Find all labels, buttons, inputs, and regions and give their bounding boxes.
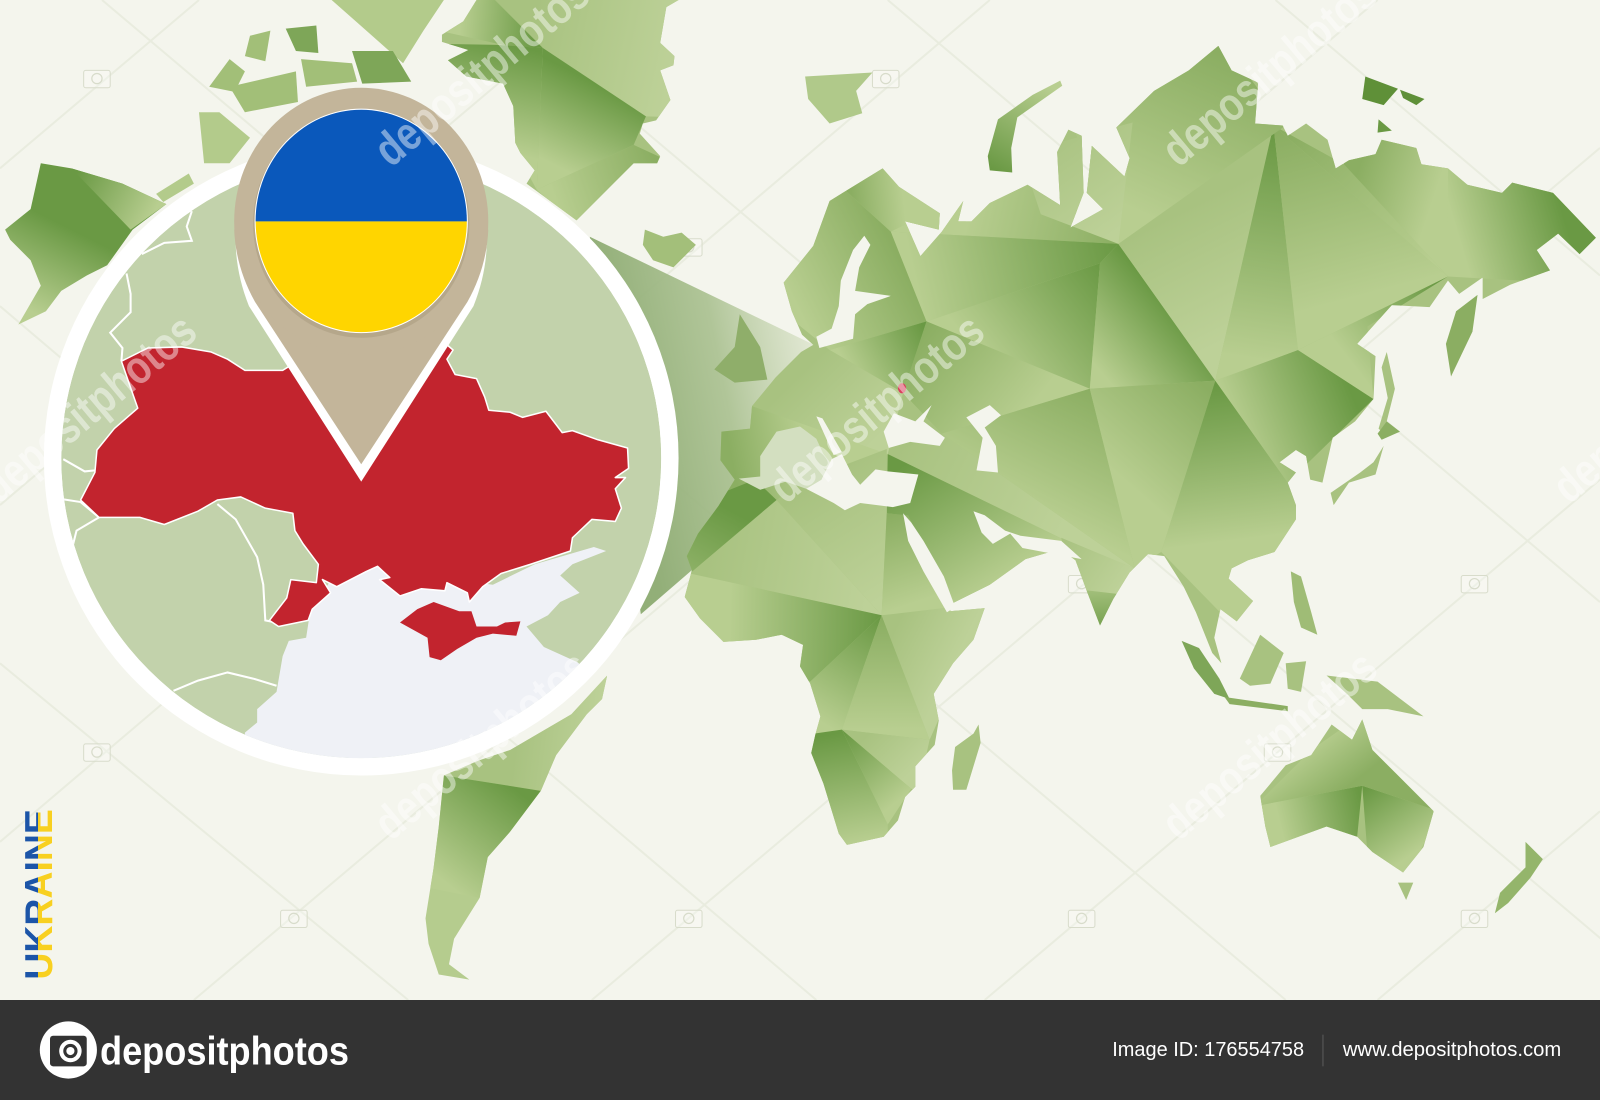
seas cut out of the land — [806, 236, 1082, 612]
continent: Greenland — [439, 0, 684, 224]
title: UKRAINE vertical: UKRAINE — [18, 809, 61, 980]
map pin with Ukrainian flag — [234, 88, 488, 482]
flag — [256, 110, 467, 332]
islands: New Zealand, Tasmania, Madagascar — [952, 724, 1543, 913]
Black Sea and Sea of Azov — [244, 547, 606, 758]
depositphotos watermarks — [0, 0, 1600, 849]
neighbouring country borders — [61, 211, 286, 691]
continent: South America — [426, 676, 607, 980]
image id: Image ID: 176554758 — [1112, 1039, 1304, 1061]
magnifier cone from Ukraine to the circle — [590, 237, 903, 614]
continent: Iceland and Britain — [643, 230, 767, 383]
depositphotos watermarks: depositphotos — [364, 640, 599, 849]
continent: Australia — [1260, 720, 1434, 872]
Crimea — [400, 602, 520, 660]
depositphotos watermarks: depositphotos — [1152, 640, 1387, 849]
footer logo wordmark: depositphotos — [100, 1029, 349, 1073]
website url: www.depositphotos.com — [1342, 1039, 1561, 1061]
continent: Eurasia and Africa — [663, 31, 1600, 867]
continent: North America fragments — [5, 0, 444, 324]
islands: Arctic and East Asia — [805, 72, 1478, 716]
magnified map circle — [44, 141, 679, 796]
icon: depositphotos camera logo — [40, 1021, 97, 1079]
icon: location marker on Ukraine — [898, 383, 906, 393]
camera watermark icons — [84, 70, 1488, 928]
depositphotos watermarks: depositphotos — [759, 304, 994, 513]
west Mediterranean seen through the cone — [739, 427, 832, 490]
Ukraine mainland — [81, 344, 629, 627]
footer bar — [0, 1000, 1600, 1100]
